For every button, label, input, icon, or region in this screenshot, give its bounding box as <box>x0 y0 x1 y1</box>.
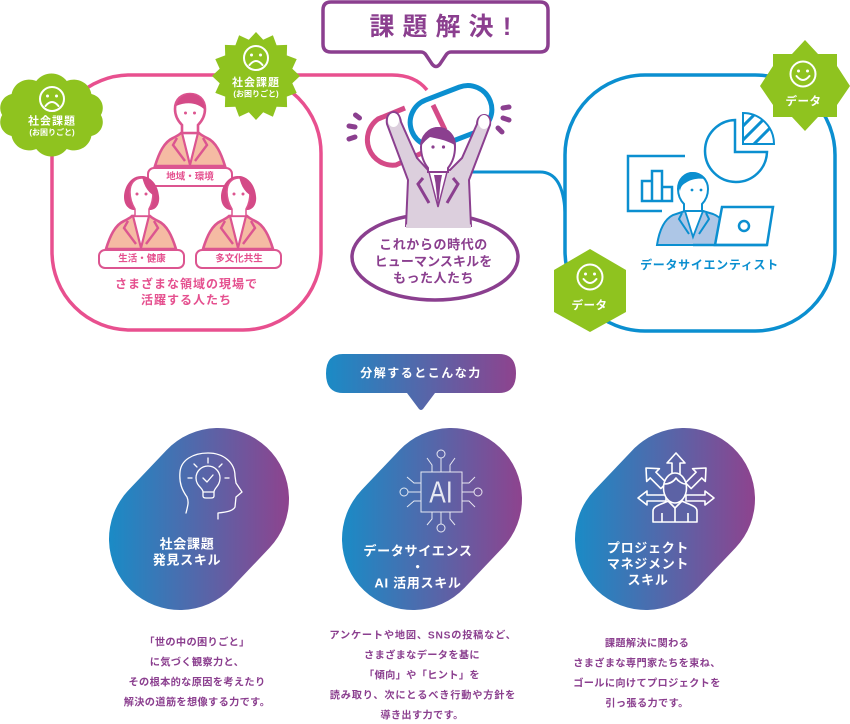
text block: data science description: 読み取り、次にとるべき行動や方針を <box>330 688 516 702</box>
label: community and environment <box>148 168 232 186</box>
text block: project management description: 課題解決に関わる <box>605 636 689 650</box>
icon: laptop <box>693 207 773 245</box>
label: life and health: 生活・健康 <box>118 252 166 264</box>
caption: people active in many fields: 活躍する人たち <box>141 292 232 307</box>
text: human skills: これからの時代の <box>379 237 488 252</box>
panel: social issue discovery skill <box>153 453 242 568</box>
icon: AI chip <box>400 450 482 532</box>
panel: social issue discovery skill: 発見スキル <box>153 552 221 568</box>
panel: data science and AI skill <box>363 450 482 590</box>
panel: project management skill: スキル <box>627 572 669 588</box>
label: life and health <box>99 250 184 268</box>
badge: social issue star: (お困りごと) <box>233 88 279 98</box>
icon: pink capsule half <box>367 105 445 165</box>
text: human skills <box>375 237 492 286</box>
label: data scientist: データサイエンティスト <box>640 257 779 272</box>
label: community and environment: 地域・環境 <box>166 170 214 182</box>
caption: people active in many fields: さまざまな領域の現場で <box>115 276 258 291</box>
panel: blue data scientist frame <box>470 75 835 331</box>
icon: pie chart <box>705 112 776 182</box>
label: multicultural <box>196 250 281 268</box>
callout: problem solved: ! <box>503 13 511 41</box>
badge: social issue star: 社会課題 <box>232 75 280 89</box>
panel: project management skill: プロジェクト <box>607 540 689 556</box>
text: human skills: もった人たち <box>393 270 474 286</box>
text block: project management description: ゴールに向けてプロジェクトを <box>573 676 721 690</box>
panel: project management skill: マネジメント <box>607 556 689 572</box>
icon: head with lightbulb <box>180 453 242 519</box>
badge: social issue cloud: (お困りごと) <box>29 127 75 137</box>
text block: data science description: 導き出す力です。 <box>380 708 464 722</box>
badge: social issue cloud: 社会課題 <box>28 114 76 128</box>
speech ellipse outline <box>352 214 518 300</box>
badge: social issue cloud <box>0 74 103 156</box>
text block: social issue discovery description: 「世の中の困りごと」 <box>144 636 250 648</box>
text block: data science description: さまざまなデータを基に <box>364 648 480 662</box>
text block: project management description: 引っ張る力です。 <box>605 696 689 710</box>
badge: data hexagon <box>554 249 626 332</box>
person: right, multicultural <box>203 176 273 249</box>
text block: social issue discovery description: 解決の道筋を想像する力です。 <box>124 696 270 708</box>
text block: data science description: 「傾向」や「ヒント」を <box>364 668 480 682</box>
banner: broken down into skills: 分解するとこんな力 <box>360 365 482 380</box>
panel: data science and AI skill: AI 活用スキル <box>374 576 462 590</box>
badge: data hexagon: データ <box>572 298 608 312</box>
banner: broken down into skills <box>326 354 516 410</box>
badge: social issue star <box>212 32 300 120</box>
icon: bar chart board <box>628 156 685 211</box>
text block: data science description <box>329 628 517 722</box>
text block: data science description: アンケートや地図、SNSの投稿など、 <box>329 628 517 642</box>
person: top, community and environment <box>155 94 225 166</box>
icon: burst marks <box>349 107 509 139</box>
label: multicultural: 多文化共生 <box>215 252 263 264</box>
callout: problem solved: 課題解決 <box>369 13 502 41</box>
text block: social issue discovery description: に気づく観察力と、 <box>150 656 244 668</box>
text block: social issue discovery description <box>124 636 270 708</box>
panel: project management skill <box>607 453 714 588</box>
icon: blue capsule half <box>403 79 499 153</box>
panel: data science and AI skill: ・ <box>411 560 425 574</box>
person: data scientist <box>657 172 721 245</box>
text block: social issue discovery description: その根本的な原因を考えたり <box>128 676 266 688</box>
panel: data science and AI skill: データサイエンス <box>363 544 473 558</box>
panel: data science and AI skill: AI <box>429 475 453 509</box>
person: man raising arms <box>387 112 490 228</box>
badge: data star <box>760 40 850 131</box>
text block: project management description: さまざまな専門家たちを束ね、 <box>573 656 721 670</box>
text block: project management description <box>573 636 721 710</box>
icon: person with arrows <box>638 453 714 522</box>
badge: data star: データ <box>786 94 822 108</box>
text: human skills: ヒューマンスキルを <box>375 254 492 269</box>
panel: pink people frame <box>52 75 427 330</box>
caption: people active in many fields <box>115 276 258 307</box>
callout: problem solved <box>323 2 548 66</box>
person: left, life and health <box>106 176 176 249</box>
panel: social issue discovery skill: 社会課題 <box>160 536 214 552</box>
